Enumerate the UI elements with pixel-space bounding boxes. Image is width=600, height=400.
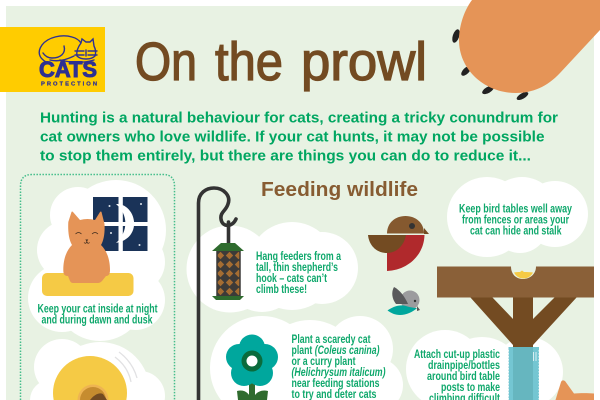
icon: robin: [368, 216, 429, 271]
panel: keep cats indoors (dotted border): [20, 174, 174, 400]
heading: feeding wildlife: Feeding wildlife: [261, 179, 418, 201]
tip: attach drainpipe around bird table posts: [406, 330, 563, 400]
caption: around bird table: [427, 371, 500, 383]
caption: posts to make: [441, 382, 500, 394]
icon: cat peeking at bottom right: [556, 380, 594, 400]
tip: plant a scaredy cat plant: [210, 316, 403, 400]
icon: cat paw with claws: [451, 0, 600, 102]
caption: [38, 304, 158, 326]
title: On: [135, 32, 197, 92]
caption: and during dawn and dusk: [42, 314, 153, 326]
caption: cat can hide and stalk: [470, 226, 562, 238]
caption: climb these!: [256, 284, 307, 296]
caption: from fences or areas your: [462, 214, 569, 226]
icon: bell: [53, 352, 137, 400]
intro text: Hunting is a natural behaviour for cats, creating a tricky conundrum for: [40, 110, 558, 126]
caption: Attach cut-up plastic: [414, 349, 500, 361]
caption: [414, 349, 500, 400]
icon: shepherd's hook: [198, 188, 236, 400]
icon: bird feeder: [212, 243, 244, 300]
caption: Hang feeders from a: [256, 251, 341, 263]
caption: drainpipe/bottles: [428, 360, 500, 372]
caption: (Helichrysum italicum): [292, 367, 386, 379]
icon: flower: [226, 334, 278, 400]
caption: [256, 251, 341, 296]
caption: hook – cats can’t: [256, 273, 327, 285]
intro text: cat owners who love wildlife. If your cat hunts, it may not be possible: [40, 128, 544, 146]
icon: night window: [93, 197, 148, 251]
icon: cat bed: [42, 273, 134, 296]
icon: cat: [63, 212, 110, 283]
caption: [459, 204, 572, 238]
tip: keep your cat inside at night: [28, 180, 166, 341]
tip: hang feeders from a shepherd's hook: [186, 188, 358, 400]
tip: second cloud with cat bell: [30, 339, 165, 400]
logo: Cats Protection: PROTECTION: [41, 82, 97, 88]
intro text: to stop them entirely, but there are things you can do to reduce it...: [40, 148, 531, 164]
logo: Cats Protection: [0, 27, 105, 92]
caption: [292, 334, 386, 400]
icon: drainpipe on post: [508, 347, 539, 400]
title: the: [215, 32, 283, 92]
title: prowl: [301, 32, 427, 92]
icon: small bird: [388, 287, 420, 315]
caption: tall, thin shepherd’s: [256, 262, 338, 274]
caption: or a curry plant: [292, 356, 356, 368]
icon: bird table: [437, 266, 594, 350]
caption: Keep your cat inside at night: [38, 304, 158, 316]
title: [135, 32, 427, 92]
caption: Plant a scaredy cat: [292, 334, 371, 346]
caption: near feeding stations: [292, 378, 380, 390]
tip: keep bird tables away from fences: [447, 177, 588, 257]
logo: Cats Protection: CATS: [39, 57, 97, 82]
caption: plant (Coleus canina): [292, 345, 380, 357]
intro text: [40, 110, 558, 164]
